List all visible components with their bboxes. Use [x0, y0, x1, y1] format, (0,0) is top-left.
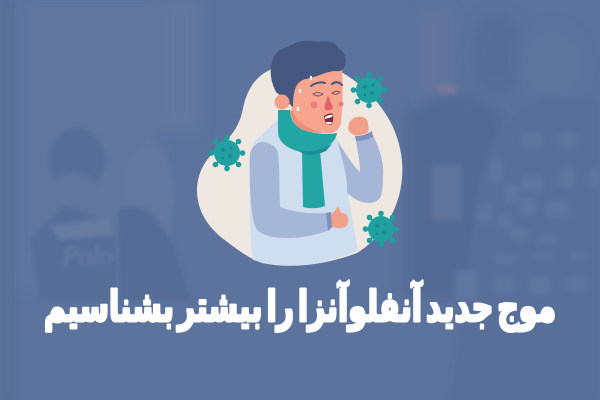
cheeks [311, 102, 317, 108]
icon: virus left [210, 136, 244, 170]
vest body [250, 120, 358, 265]
hair [271, 41, 346, 107]
ear [274, 94, 290, 110]
cuff raised arm [355, 131, 373, 141]
illustration: coughing man [197, 41, 402, 266]
hand on belly [331, 207, 348, 228]
icon: virus top right [352, 73, 386, 107]
raised arm [338, 133, 383, 203]
eyes and brows [311, 82, 342, 96]
icon: virus bottom right [364, 212, 398, 246]
sweat drops [297, 76, 312, 111]
mouth [324, 113, 333, 125]
near arm [250, 142, 330, 238]
background: faded crowd photo [54, 7, 498, 294]
face [290, 68, 343, 133]
Polo shirt lettering: Polo [61, 241, 113, 271]
blob backdrop [197, 63, 402, 266]
fist [348, 117, 369, 135]
cuff near arm [326, 212, 333, 231]
nose [325, 95, 333, 110]
neck [290, 110, 330, 133]
scarf wrap [278, 110, 337, 153]
scarf tail [302, 150, 325, 208]
